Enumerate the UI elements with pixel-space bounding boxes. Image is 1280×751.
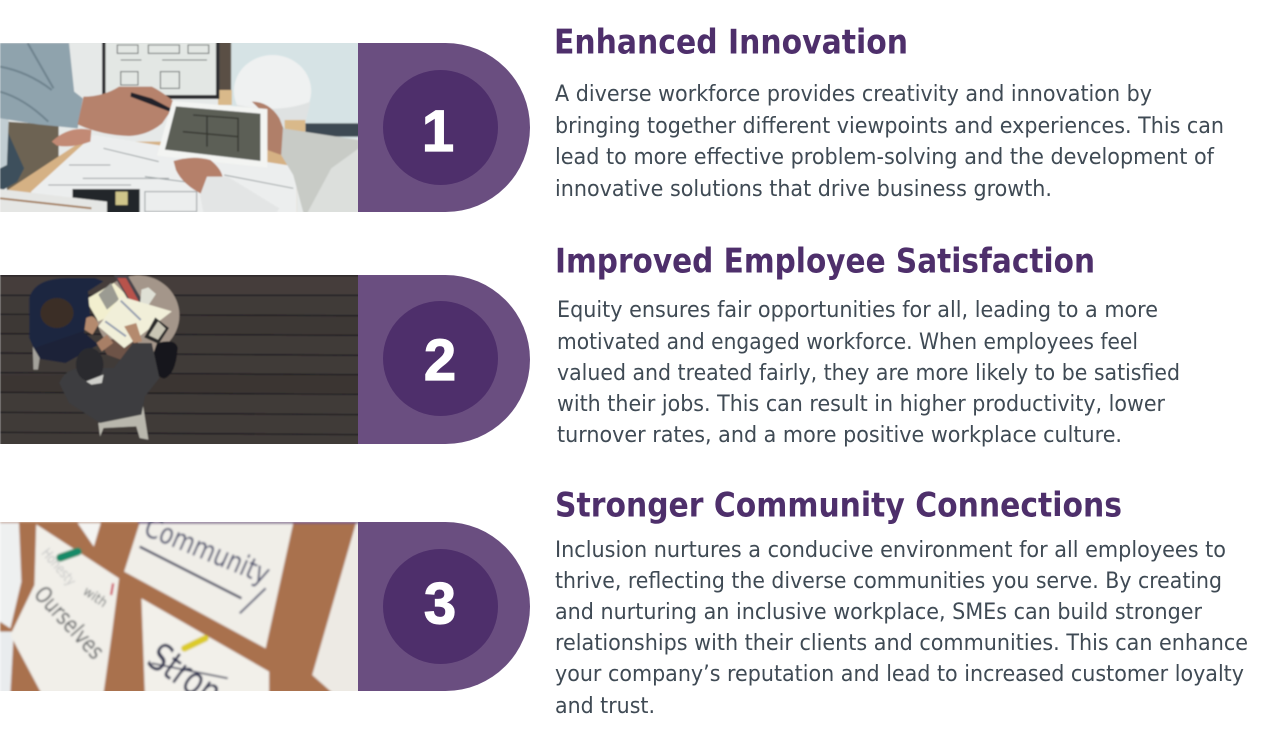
text block: improved employee satisfaction	[557, 298, 1180, 448]
number badge 1: 1	[422, 99, 454, 164]
photo: notes pinned to a cork board: Honesty	[38, 546, 79, 589]
panel: improved employee satisfaction	[0, 242, 1180, 448]
text block: improved employee satisfaction: with their jobs. This can result in higher productivity, lower	[557, 392, 1166, 417]
text block: stronger community connections: and nurturing an inclusive workplace, SMEs can build stronger	[555, 600, 1203, 625]
photo: notes pinned to a cork board: Community	[139, 510, 275, 591]
number badge 3	[358, 522, 530, 691]
photo: notes pinned to a cork board	[0, 522, 358, 691]
heading: enhanced innovation: Enhanced Innovation	[554, 22, 908, 62]
heading: improved employee satisfaction: Improved Employee Satisfaction	[555, 242, 1095, 280]
number badge 3: 3	[424, 572, 456, 636]
panel: enhanced innovation	[0, 22, 1224, 213]
text block: enhanced innovation: A diverse workforce provides creativity and innovation by	[555, 82, 1152, 107]
photo: notes pinned to a cork board: Stron	[139, 634, 231, 715]
text block: stronger community connections: and trust.	[555, 694, 655, 719]
photo: notes pinned to a cork board: Ourselves	[28, 582, 109, 665]
text block: improved employee satisfaction: motivated and engaged workforce. When employees feel	[557, 330, 1138, 355]
text block: enhanced innovation: innovative solutions that drive business growth.	[555, 177, 1052, 202]
text block: improved employee satisfaction: Equity ensures fair opportunities for all, leading to a more	[557, 298, 1158, 323]
text block: stronger community connections: thrive, reflecting the diverse communities you serve. By creating	[555, 569, 1222, 594]
number badge 1	[358, 43, 530, 212]
panel: stronger community connections	[0, 486, 1248, 719]
photo: notes pinned to a cork board: with	[80, 584, 110, 611]
text block: improved employee satisfaction: valued and treated fairly, they are more likely to be satisfied	[557, 361, 1180, 386]
number badge 2	[358, 275, 530, 444]
text block: stronger community connections: relationships with their clients and communities. This can enhance	[555, 631, 1248, 656]
text block: stronger community connections: Inclusion nurtures a conducive environment for all employees to	[555, 538, 1226, 563]
text block: enhanced innovation: lead to more effective problem-solving and the development of	[555, 145, 1215, 170]
photo: architects reviewing plans on a tablet	[0, 42, 361, 213]
text block: enhanced innovation	[555, 82, 1224, 202]
number badge 2: 2	[424, 328, 456, 393]
text block: enhanced innovation: bringing together different viewpoints and experiences. This can	[555, 114, 1224, 139]
text block: improved employee satisfaction: turnover rates, and a more positive workplace culture.	[557, 423, 1122, 448]
text block: stronger community connections: your company’s reputation and lead to increased customer loyalty	[555, 662, 1244, 687]
photo: overhead view of two businessmen at a table	[0, 273, 361, 446]
heading: stronger community connections: Stronger Community Connections	[555, 486, 1122, 524]
text block: stronger community connections	[555, 538, 1248, 719]
